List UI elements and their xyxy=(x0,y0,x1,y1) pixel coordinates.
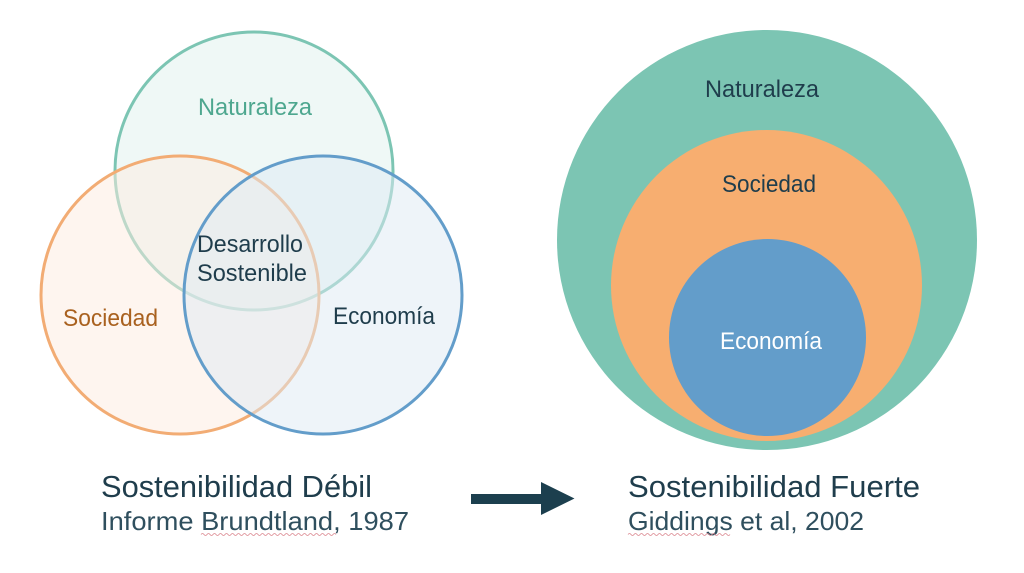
spellcheck underline xyxy=(201,534,336,536)
label: Desarrollo Sostenible xyxy=(197,231,307,287)
label: Sociedad: Sociedad xyxy=(63,305,158,332)
label: Economía: Economía xyxy=(333,303,436,330)
circle: Naturaleza xyxy=(115,32,393,310)
circle: Economía xyxy=(184,156,462,434)
source: Informe Brundtland, 1987 xyxy=(101,506,409,536)
caption: Sostenibilidad Débil xyxy=(101,469,409,536)
circle: Naturaleza xyxy=(557,30,977,450)
circle: Sociedad xyxy=(611,130,922,441)
label: Naturaleza: Naturaleza xyxy=(198,94,313,121)
caption: Sostenibilidad Fuerte xyxy=(628,469,920,536)
spellcheck underline xyxy=(628,534,730,536)
label: Desarrollo Sostenible: Desarrollo xyxy=(197,231,303,258)
panel: strong sustainability nested circles xyxy=(557,30,977,450)
label: Naturaleza: Naturaleza xyxy=(705,76,820,103)
circle: Sociedad xyxy=(41,156,319,434)
panel: weak sustainability venn diagram xyxy=(41,32,462,434)
circle: Economía xyxy=(669,239,866,436)
label: Economía: Economía xyxy=(720,328,823,355)
label: Desarrollo Sostenible: Sostenible xyxy=(197,260,307,287)
heading: Sostenibilidad Fuerte xyxy=(628,469,920,504)
label: Sociedad: Sociedad xyxy=(722,171,816,198)
arrow xyxy=(471,482,574,515)
heading: Sostenibilidad Débil xyxy=(101,469,372,504)
source: Giddings et al, 2002 xyxy=(628,506,864,536)
